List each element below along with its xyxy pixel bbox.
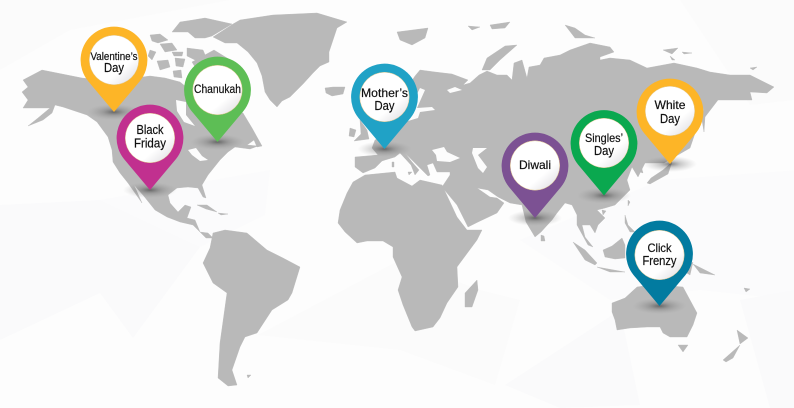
pin: Click Frenzy: Click [648, 241, 672, 255]
pin: Click Frenzy [626, 221, 693, 314]
Arctic isles [397, 22, 757, 70]
pin: Diwali: Diwali [519, 158, 551, 172]
inland seas [176, 87, 487, 173]
pin: Singles' Day [571, 110, 637, 204]
pin: Black Friday: Friday [134, 136, 167, 150]
pin: Valentine's Day: Valentine’s [90, 51, 138, 63]
pin: White Day: Day [660, 112, 681, 126]
North America [22, 70, 262, 238]
pin: Chanukah: Chanukah [194, 84, 241, 96]
Canadian Arctic islands [148, 18, 240, 78]
South America [203, 230, 300, 386]
pin: Chanukah [184, 57, 251, 150]
Africa [338, 172, 482, 331]
Tasmania and New Zealand [678, 330, 748, 362]
pin: White Day [637, 79, 703, 172]
Novaya Zemlya [482, 45, 517, 70]
pin: White Day: White [654, 98, 686, 112]
pin: Black Friday: Black [136, 123, 164, 137]
pin: Click Frenzy: Frenzy [642, 254, 677, 268]
pin: Valentine's Day: Day [104, 61, 125, 75]
pin: Black Friday [117, 105, 183, 198]
Eurasia [355, 43, 774, 247]
Greenland [213, 13, 347, 107]
Iceland [325, 87, 345, 96]
pin: Diwali [502, 133, 568, 226]
pin: Singles' Day: Day [594, 144, 615, 158]
pin: Mother's Day: Mother’s [361, 86, 408, 100]
pin: Singles' Day: Singles’ [585, 131, 623, 145]
Asia-Pacific islands [541, 162, 750, 292]
Madagascar [465, 280, 478, 307]
Mediterranean islands [392, 162, 412, 175]
pin: Mother's Day: Day [374, 99, 395, 113]
pin: Valentine's Day [81, 27, 147, 120]
Caribbean islands and Falklands [197, 205, 251, 378]
Britain and Ireland [349, 120, 369, 141]
pin: Mother's Day [351, 64, 418, 157]
Australia [612, 285, 697, 337]
